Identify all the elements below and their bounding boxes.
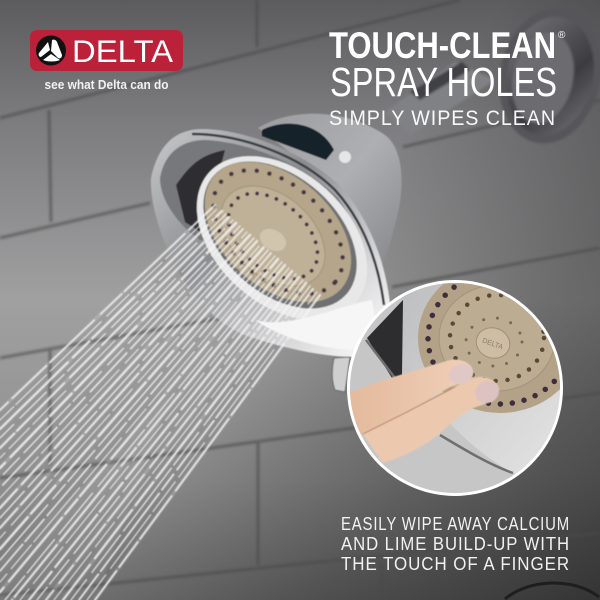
head: chrome rim [151,129,390,357]
title: registered mark: ® [558,30,566,41]
head: bright lower chrome [255,300,374,350]
logo: tagline: see what Delta can do [44,78,169,92]
wall mount plate and shower arm [385,0,600,153]
inset: grey backdrop [350,283,560,493]
inset: fingers [345,360,503,463]
inset: rim line [366,340,513,473]
caption: THE TOUCH OF A FINGER [341,554,570,574]
logo: red badge [30,30,183,71]
inset: tan spray face [418,283,560,413]
bottom corner fixture arc [505,583,599,599]
inset: chrome body [402,284,560,474]
head: spray holes [190,146,366,318]
title: line one: TOUCH-CLEAN [329,25,556,66]
water spray [0,205,320,600]
inset: fingernails [448,364,474,384]
head: tan spray face [178,134,378,330]
shower head [151,114,402,392]
inset: center cap [476,327,510,359]
inset: center cap: DELTA [481,337,504,351]
logo [30,30,183,92]
subtitle: SIMPLY WIPES CLEAN [329,106,556,130]
inset circle: finger wiping spray face [347,280,563,496]
title [329,25,566,130]
inset: dark shadow wedge [367,300,403,378]
inset: spray holes [425,283,557,407]
caption: AND LIME BUILD-UP WITH [341,534,570,554]
head: rear dome [258,114,402,270]
head: dark reflection [262,124,334,160]
logo: wordmark: DELTA [72,33,173,69]
inset: raised disc [439,285,555,391]
head: white bezel [165,123,399,353]
caption [341,514,570,574]
head: swivel ball [332,357,350,392]
logo: delta emblem [36,36,66,66]
